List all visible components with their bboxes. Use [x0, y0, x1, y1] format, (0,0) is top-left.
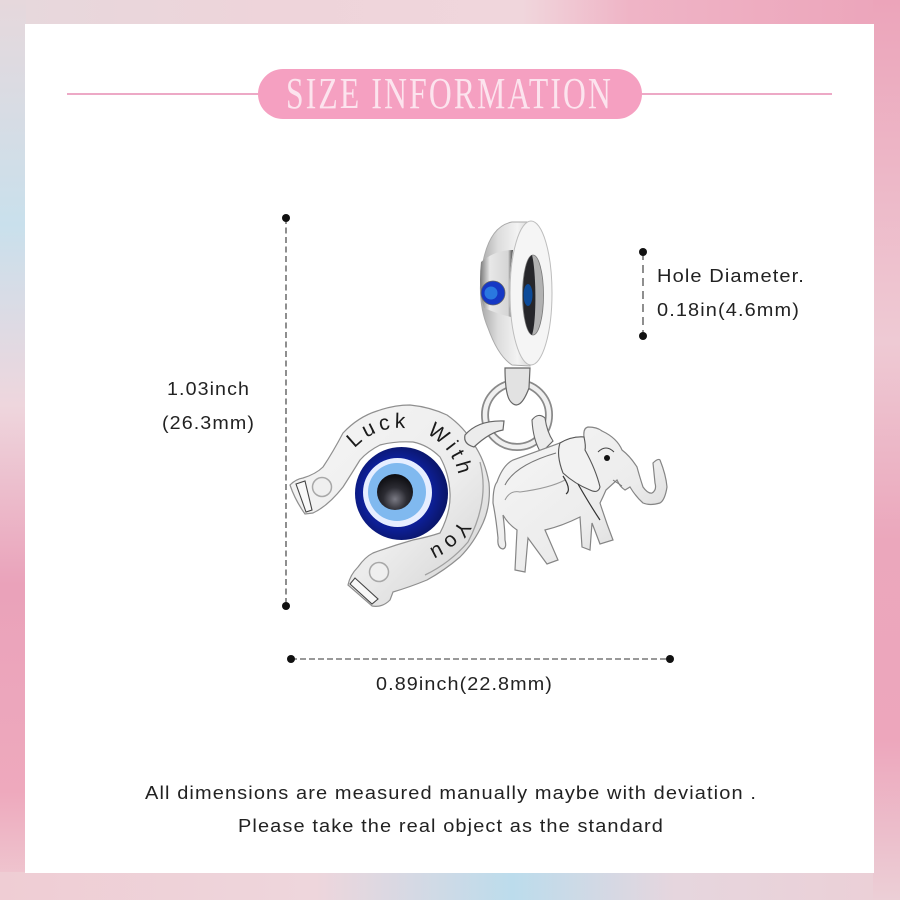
hole dimension line [639, 248, 647, 340]
charm illustration [289, 220, 668, 607]
elephant [493, 415, 667, 572]
disclaimer text [145, 783, 757, 836]
engraved text: Luck With You [346, 412, 472, 558]
connector link [465, 421, 504, 447]
height label: (26.3mm) [162, 413, 255, 433]
height label [162, 379, 255, 433]
jump ring [485, 383, 549, 447]
height dimension line [282, 214, 290, 610]
title banner: SIZE INFORMATION [286, 69, 613, 118]
width label: 0.89inch(22.8mm) [376, 674, 553, 694]
disclaimer text: All dimensions are measured manually maybe with deviation . [145, 783, 757, 803]
disclaimer text: Please take the real object as the standard [238, 816, 664, 836]
evil eye [355, 447, 448, 540]
horseshoe with eye [289, 404, 490, 607]
width dimension line [287, 655, 674, 663]
height label: 1.03inch [167, 379, 250, 399]
hole label [657, 266, 805, 320]
title banner [67, 69, 832, 119]
bail with blue stone [480, 221, 552, 405]
hole label: 0.18in(4.6mm) [657, 300, 800, 320]
hole label: Hole Diameter. [657, 266, 805, 286]
